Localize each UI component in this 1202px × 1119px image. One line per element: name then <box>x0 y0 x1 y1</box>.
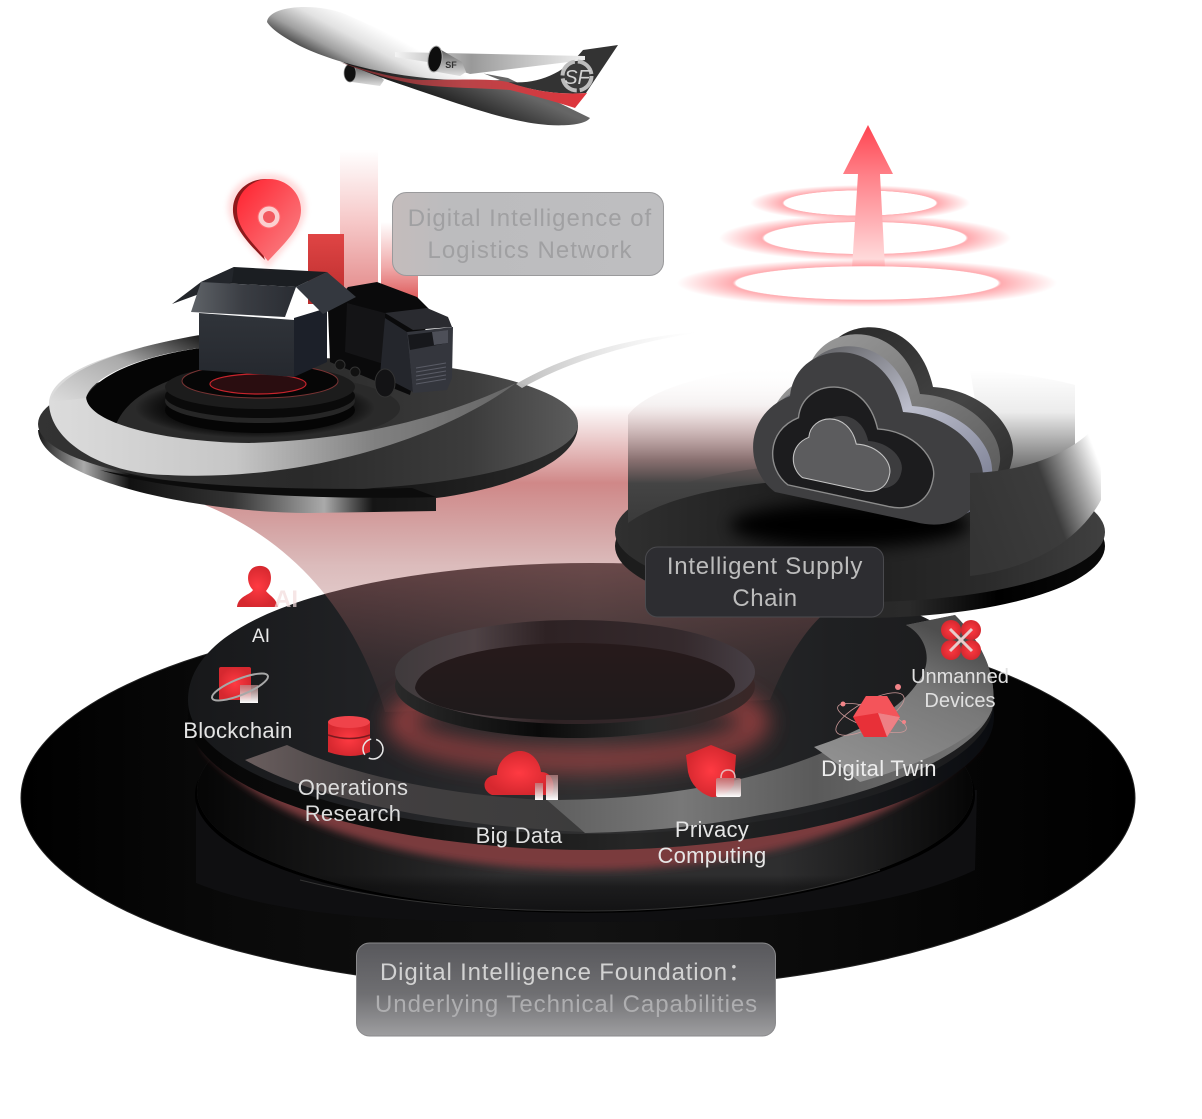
technology: privacy computing: Computing <box>657 843 767 868</box>
cab side <box>380 318 413 392</box>
technology: operations research: Research <box>305 801 401 826</box>
left platform: logistics disc <box>38 332 700 513</box>
technology: blockchain <box>183 667 293 743</box>
glass panel: back right <box>970 370 1075 490</box>
technology: AI <box>237 566 298 647</box>
fuselage white nose <box>267 7 500 81</box>
callout: digital intelligence foundation: Underlying Technical Capabilities <box>375 991 758 1018</box>
technology: operations research <box>298 716 408 826</box>
front face <box>199 313 294 377</box>
inner black ring <box>135 378 375 438</box>
icon: cloud with bars <box>485 751 558 800</box>
pink light funnel <box>205 400 860 712</box>
label: Blockchain <box>183 718 293 743</box>
cloud inner layer <box>773 387 934 508</box>
right flap <box>296 272 356 314</box>
swoosh upper arm <box>50 335 200 402</box>
swirl band: left dim segment <box>245 745 585 832</box>
glass panel: front right <box>970 420 1101 576</box>
airplane <box>267 7 618 125</box>
cloud back extrusion <box>783 327 1013 500</box>
icon: layered cloud <box>753 327 1013 525</box>
technology: unmanned devices: Devices <box>924 690 996 712</box>
callout: digital intelligence foundation <box>356 943 776 1036</box>
cloud shadow layer <box>805 416 902 488</box>
red glow around central ring <box>398 684 758 760</box>
icon: open parcel box <box>172 267 356 377</box>
icon: shield with padlock <box>686 745 741 797</box>
signal ring: bottom <box>677 259 1057 307</box>
label: Privacy <box>675 817 749 842</box>
tall pale bar <box>340 150 378 310</box>
swoosh thin tail <box>516 332 700 388</box>
glass panel: left <box>628 365 800 523</box>
callout: intelligent supply chain <box>646 547 884 617</box>
cloud steel strip <box>762 346 992 519</box>
black left arc <box>86 348 230 435</box>
callout: digital intelligence foundation: Digital Intelligence Foundation： <box>380 959 753 986</box>
pedestal cylinder <box>195 671 977 922</box>
right platform: supply chain disc <box>615 462 1105 618</box>
callout: intelligent supply chain: Chain <box>732 585 798 612</box>
icon: database with cycle <box>328 716 383 759</box>
signal ring: middle <box>719 215 1011 261</box>
technology: digital twin <box>821 684 937 781</box>
label: AI <box>252 626 270 647</box>
icon: cube with orbits <box>830 684 910 743</box>
label: Operations <box>298 775 408 800</box>
icon: person with AI mark: AI <box>274 586 298 613</box>
callout: digital intelligence of logistics network: Logistics Network <box>427 237 633 264</box>
fuselage dark belly <box>300 40 590 125</box>
main disc: top surface <box>188 563 994 834</box>
icon: drone <box>941 620 981 660</box>
short red bar <box>308 234 344 304</box>
ring top surface <box>395 620 755 724</box>
technology: unmanned devices <box>911 620 1009 712</box>
callout: intelligent supply chain: Intelligent Supply <box>667 553 863 580</box>
technology: privacy computing <box>657 745 767 868</box>
cargo body <box>328 282 430 395</box>
label: Unmanned <box>911 666 1009 688</box>
grille <box>416 363 446 384</box>
icon: truck <box>328 282 453 397</box>
tail fin <box>508 45 618 93</box>
stacked platform <box>165 364 355 433</box>
main disc: rim <box>188 579 994 850</box>
bar chart behind the parcel <box>308 150 418 312</box>
swoosh crescent <box>49 335 516 476</box>
technology: big data <box>476 751 563 848</box>
grey floor ring <box>80 372 400 444</box>
dark shadow <box>730 503 970 547</box>
left flap <box>172 267 234 304</box>
swirl band: bright wedge <box>814 615 993 782</box>
cloud grey rim <box>770 334 1000 507</box>
label: Digital Twin <box>821 756 937 781</box>
icon: rising arrow with signal rings <box>677 125 1057 307</box>
tail logo: SF <box>564 67 592 89</box>
pink bar <box>381 222 418 312</box>
front engine <box>426 45 466 76</box>
cargo side <box>345 303 387 365</box>
ring hole <box>415 643 735 720</box>
central ring <box>395 620 755 738</box>
rear engine <box>344 64 384 86</box>
arrow shaft and head <box>843 125 893 268</box>
disc top surface <box>38 358 578 490</box>
red stripe <box>340 62 587 108</box>
callout: digital intelligence of logistics network: Digital Intelligence of <box>408 205 652 232</box>
callout: digital intelligence of logistics network <box>392 192 664 276</box>
side face <box>294 308 327 377</box>
cab front <box>407 327 453 393</box>
base disc: outer black ellipse <box>21 605 1135 991</box>
wheels <box>375 369 395 397</box>
ring side <box>395 634 755 738</box>
front flap <box>191 282 296 317</box>
swirl band: centre and right segment <box>547 615 993 833</box>
inner back <box>201 267 327 287</box>
label: Big Data <box>476 823 563 848</box>
tail logo <box>562 62 592 90</box>
cloud front face <box>753 352 983 525</box>
signal ring: top <box>750 185 970 221</box>
red glow band under the top disc <box>200 700 980 870</box>
disc rim <box>38 425 578 513</box>
black lower groove <box>100 470 436 498</box>
icon: red location pin <box>228 174 306 268</box>
front engine: SF <box>445 60 457 70</box>
wing <box>395 52 585 74</box>
disc rim <box>615 474 1105 618</box>
cloud inner core <box>793 419 890 491</box>
icon: cube with orbit <box>209 667 271 706</box>
windshield <box>408 330 448 350</box>
roof visor <box>385 308 452 330</box>
disc top <box>615 462 1105 602</box>
